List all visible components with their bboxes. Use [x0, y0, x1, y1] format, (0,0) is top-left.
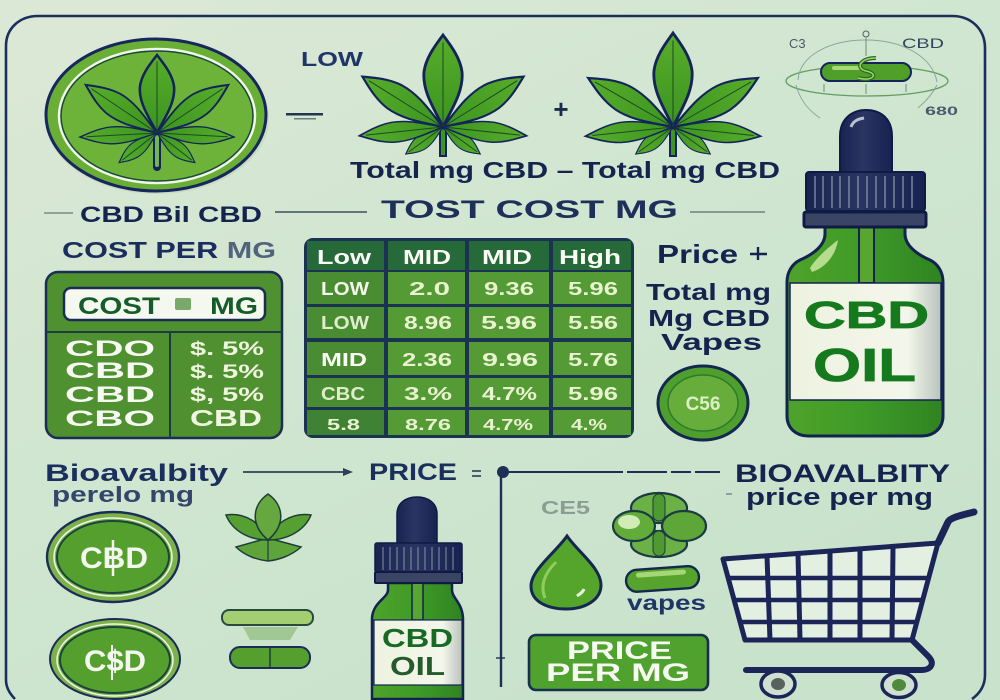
heading: bioavailability left: [45, 460, 229, 507]
button: price per mg: [529, 635, 708, 690]
icon: stacked capsules: [222, 610, 313, 668]
label pill: cost mg: COST: [78, 293, 160, 320]
table values: MID: [321, 350, 367, 370]
label: LOW: LOW: [301, 49, 363, 71]
heading: bioavailability left: perelo mg: [52, 482, 194, 507]
text: total mg mg CBD vapes: Mg CBD: [648, 305, 770, 331]
table values: 4.%: [571, 417, 607, 434]
icon: small coin: [658, 366, 748, 440]
small bottle label: CBD: [382, 623, 453, 653]
icon: oil drop: [531, 536, 601, 609]
table values: LOW: [321, 279, 369, 299]
list: product names: CDO: [65, 336, 155, 361]
table values: 5.76: [568, 350, 618, 370]
minus sign: [286, 113, 323, 120]
bottle label: CBD: [804, 295, 929, 337]
heading: COST PER MG: COST PER MG: [62, 237, 276, 263]
label: PRICE =: [369, 459, 481, 486]
small labels: [789, 35, 959, 118]
table values: 9.96: [482, 350, 538, 370]
table values: 5.96: [568, 279, 618, 299]
icon: small CBD oil bottle: [372, 497, 463, 699]
plus sign: +: [553, 94, 569, 124]
icon: cannabis leaf right: [581, 33, 765, 160]
table values: [321, 279, 618, 434]
label pill: cost mg: [64, 288, 265, 320]
icon: large CBD oil bottle: [787, 110, 943, 436]
table values: 9.36: [484, 279, 534, 299]
icon: coin CBD bottom: C$D: [84, 645, 146, 678]
heading: bioavailability price per mg: [726, 460, 950, 511]
table header: MID: [482, 247, 532, 269]
table header: Low: [317, 247, 372, 269]
list: product prices: $. 5%: [190, 339, 264, 360]
icon: coin CBD top: CBD: [80, 542, 148, 575]
table values: 5.56: [568, 313, 618, 333]
operator: [750, 247, 767, 260]
table: price tiers: [304, 238, 634, 438]
small bottle label: OIL: [390, 651, 445, 681]
panel: cost per mg card: [46, 272, 282, 438]
label: CBD Bil CBD: CBD Bil CBD: [80, 202, 262, 227]
list: product prices: $. 5%: [190, 362, 264, 383]
heading: total mg formula: Total mg CBD – Total mg CBD: [350, 157, 780, 183]
heading: bioavailability price per mg: price per mg: [746, 484, 933, 511]
table header: MID: [403, 247, 451, 269]
icon: vape capsule: [625, 565, 700, 592]
table values: 3.%: [404, 384, 452, 404]
label pill: cost mg: MG: [210, 293, 258, 320]
table cells: [307, 272, 631, 435]
heading: TOST COST MG: TOST COST MG: [381, 196, 678, 224]
table values: 4.7%: [482, 384, 537, 404]
table values: 4.7%: [483, 417, 533, 434]
table header: [307, 241, 631, 270]
list: product prices: $, 5%: [190, 385, 264, 406]
heading: bioavailability price per mg: BIOAVALBITY: [735, 460, 950, 488]
icon: coin CBD top: [47, 512, 179, 602]
icon: coin CBD bottom: [50, 619, 180, 699]
icon: cannabis leaf left: [355, 35, 531, 160]
table values: CBC: [321, 384, 365, 404]
bottle label: [790, 283, 941, 400]
text: total mg mg CBD vapes: Vapes: [661, 329, 762, 355]
table header: High: [559, 247, 621, 269]
list: product prices: [190, 339, 264, 431]
icon: capsule orbit diagram: [786, 31, 959, 118]
small labels: CBD: [902, 35, 944, 51]
icon: shopping cart: [723, 512, 974, 698]
text: total mg mg CBD vapes: Total mg: [646, 279, 771, 305]
heading: bioavailability left: Bioavalbity: [45, 460, 229, 487]
icon: large CBD coin with leaf: [45, 39, 269, 194]
table values: 8.76: [405, 417, 451, 434]
arrow: [243, 468, 353, 476]
list: product names: CBO: [65, 406, 155, 431]
list: product names: CBD: [65, 358, 155, 383]
button: price per mg: PRICE: [567, 637, 672, 665]
list: product names: [65, 336, 155, 431]
list: product prices: CBD: [190, 405, 262, 431]
table values: 5.96: [568, 384, 618, 404]
connector line: [496, 466, 720, 687]
list: product names: CBD: [65, 382, 155, 407]
bottle label: OIL: [813, 339, 916, 391]
small bottle label: [374, 620, 462, 685]
icon: small leaf: [226, 494, 311, 561]
table values: LOW: [321, 313, 369, 333]
table values: 5.8: [327, 417, 360, 434]
icon: small coin: C56: [686, 394, 720, 415]
text: total mg mg CBD vapes: [646, 279, 771, 355]
table values: 8.96: [404, 313, 452, 333]
label: faded CBD: CE5: [541, 498, 590, 518]
label: PRICE =: PRICE: [369, 459, 457, 486]
small labels: 680: [925, 104, 959, 118]
text: Price +: Price: [657, 239, 738, 269]
table values: 2.0: [409, 279, 450, 299]
button: price per mg: PER MG: [546, 659, 690, 687]
icon: four petal clover: [613, 493, 706, 557]
label: vapes: vapes: [627, 592, 706, 615]
table values: 5.96: [481, 313, 537, 333]
small labels: C3: [789, 36, 806, 51]
table values: 2.36: [402, 350, 452, 370]
